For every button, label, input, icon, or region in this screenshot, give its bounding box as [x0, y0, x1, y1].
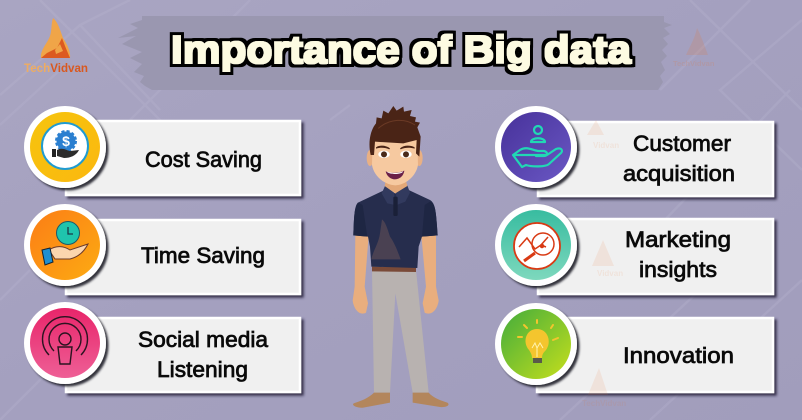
legs — [372, 270, 429, 393]
ears — [367, 150, 373, 166]
mouth — [386, 171, 404, 179]
collar — [382, 185, 410, 205]
logo: TechVidvan: TechVidvan — [24, 63, 88, 75]
hair — [369, 106, 421, 157]
icon: customer acquisition — [495, 106, 577, 188]
belt — [372, 267, 416, 272]
shirt — [353, 189, 438, 268]
label: Marketing insights: insights — [639, 257, 717, 282]
person — [353, 106, 449, 408]
panel: Time Saving — [66, 220, 300, 294]
label: Cost Saving: Cost Saving — [145, 147, 262, 172]
label: Marketing insights: Marketing — [625, 227, 731, 252]
panel: Cost Saving — [66, 121, 300, 195]
logo: TechVidvan — [24, 18, 88, 75]
panel: Innovation — [537, 318, 773, 392]
watermark: top right: TechVidvan — [673, 59, 715, 68]
icon: cost saving — [24, 106, 106, 188]
watermark on shirt — [371, 219, 401, 259]
icon: marketing insights — [495, 204, 577, 286]
watermark: top right — [673, 28, 715, 68]
watermarks on panels: Vidvan — [593, 141, 619, 150]
panel: Social media Listening — [66, 318, 300, 392]
icon: time saving — [24, 204, 106, 286]
label: Innovation: Innovation — [623, 343, 734, 368]
label: Social media Listening: Social media — [138, 327, 269, 352]
watermarks on panels: TechVidvan — [582, 399, 626, 408]
label: Social media Listening: Listening — [157, 357, 248, 382]
shoes — [353, 393, 449, 408]
icon: social media listening — [24, 302, 106, 384]
face — [372, 140, 418, 185]
watermarks on panels — [582, 120, 626, 408]
eyebrows — [376, 146, 415, 149]
watermarks on panels: Vidvan — [597, 269, 623, 278]
icon: cost saving: $ — [62, 133, 70, 149]
arms — [353, 235, 439, 314]
panel: Marketing insights — [538, 219, 773, 294]
eyes — [378, 151, 390, 158]
icon: innovation — [495, 303, 577, 385]
title: Importance of Big data — [171, 29, 631, 72]
neck — [385, 178, 407, 193]
label: Customer acquisition: Customer — [633, 131, 731, 156]
title banner — [118, 16, 672, 90]
panel: Customer acquisition — [538, 122, 773, 196]
label: Customer acquisition: acquisition — [623, 161, 735, 186]
label: Time Saving: Time Saving — [141, 243, 265, 268]
